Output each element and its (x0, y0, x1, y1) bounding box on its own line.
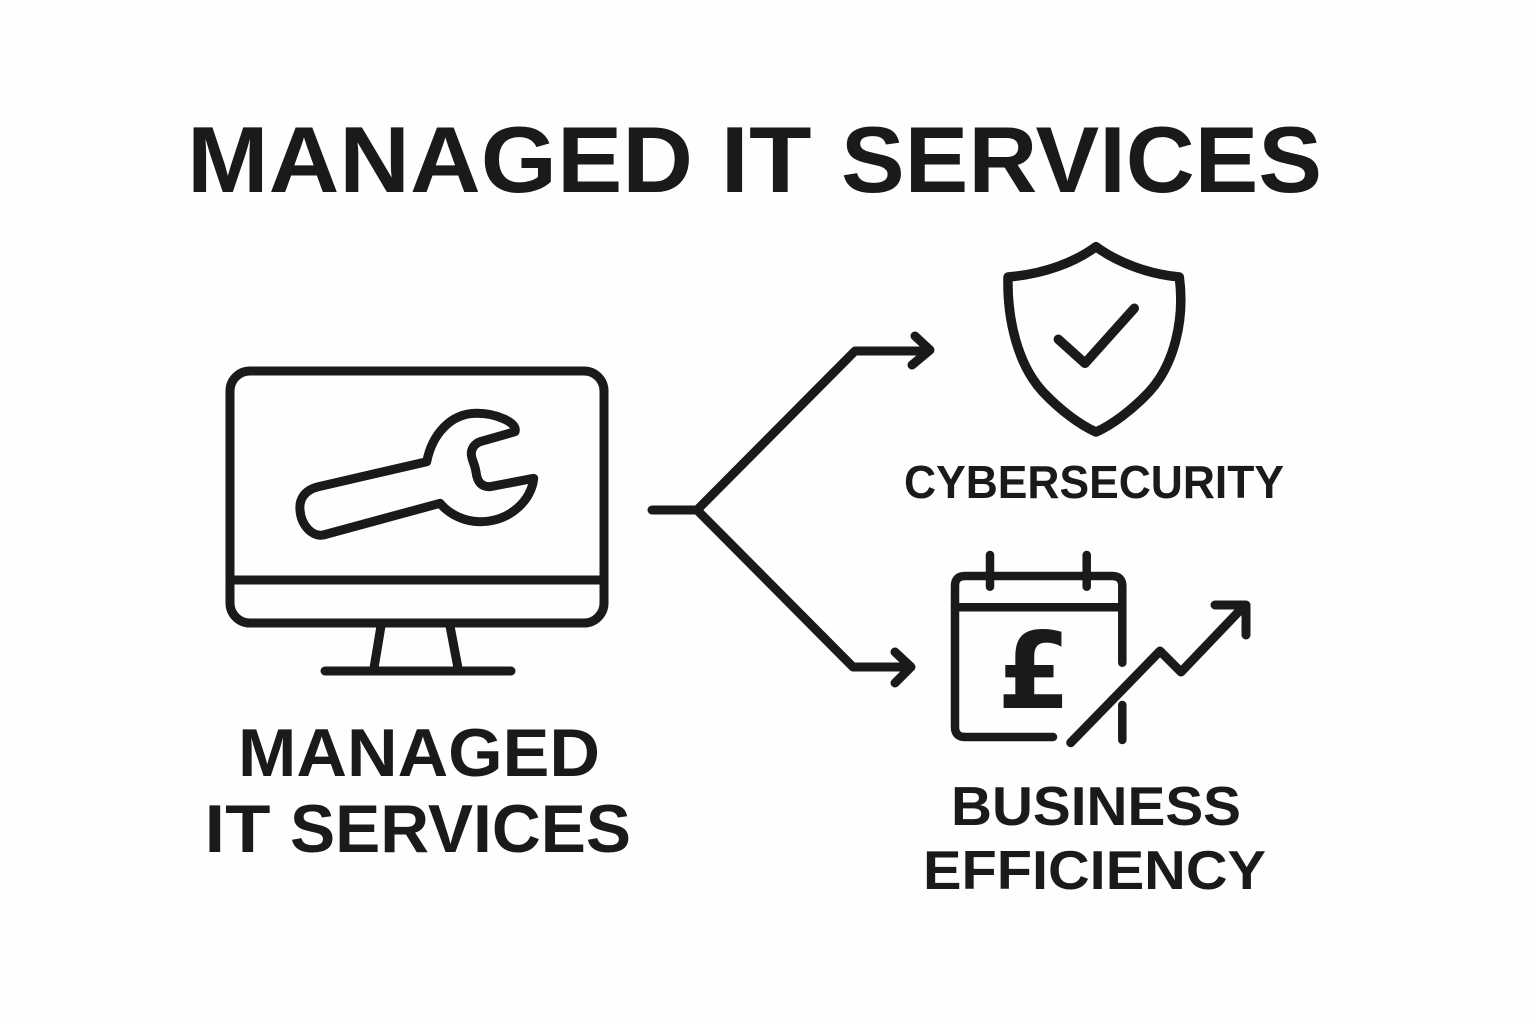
label: business efficiency: BUSINESS (951, 775, 1241, 837)
arrow: branching connector (652, 336, 930, 683)
icon: shield with check (1008, 247, 1181, 432)
label: business efficiency: EFFICIENCY (923, 839, 1266, 901)
title: IT (720, 107, 812, 212)
label: business efficiency (923, 775, 1266, 901)
icon: pound sign: £ (997, 610, 1071, 733)
title: MANAGED (187, 107, 693, 212)
title (187, 107, 1322, 212)
icon: wrench (300, 413, 534, 535)
label: cybersecurity: CYBERSECURITY (904, 456, 1284, 508)
icon: growth arrow (1071, 605, 1246, 743)
icon: check mark (1058, 308, 1134, 363)
label: managed IT services (204, 715, 631, 867)
title: SERVICES (841, 107, 1322, 212)
label: managed IT services: IT (204, 791, 270, 867)
label: managed IT services: SERVICES (290, 791, 631, 867)
label: managed IT services: MANAGED (238, 715, 600, 791)
icon: monitor with wrench (230, 371, 604, 671)
icon: calendar (955, 555, 1122, 740)
icon: calendar with pound and growth arrow (955, 555, 1246, 743)
